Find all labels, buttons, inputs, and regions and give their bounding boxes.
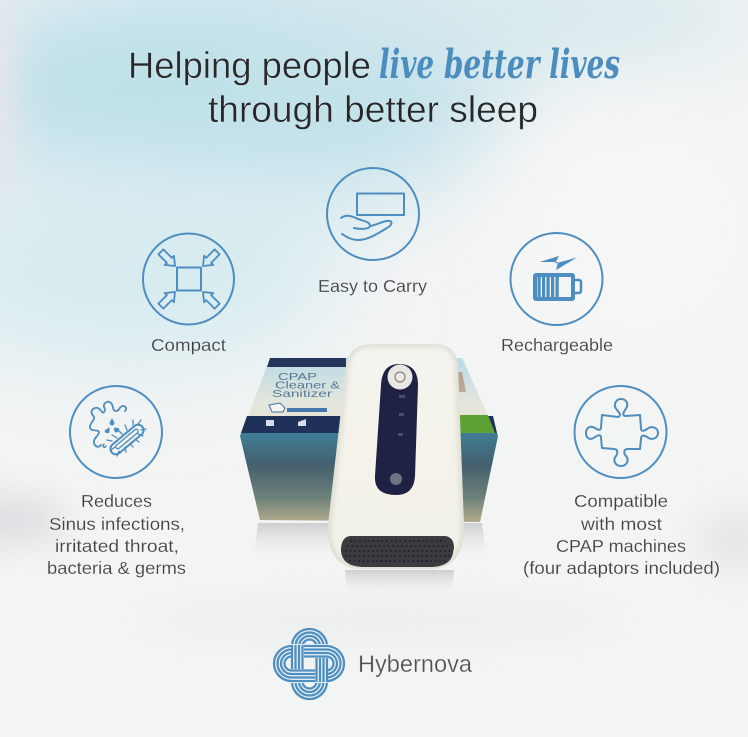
feature: reduces bbox=[47, 386, 186, 578]
icon: inward arrows bbox=[143, 234, 234, 324]
box small icons bbox=[266, 419, 306, 426]
logo mark bbox=[274, 629, 344, 699]
device body bbox=[328, 344, 464, 569]
label: compact: Compact bbox=[151, 335, 226, 355]
device edge shading bbox=[328, 344, 464, 569]
icon: hand holding device bbox=[327, 168, 419, 260]
label: compatible: (four adaptors included) bbox=[523, 558, 720, 578]
logo wordmark: Hybernova bbox=[358, 651, 472, 678]
panel indicators bbox=[398, 395, 405, 436]
feature: compact bbox=[143, 234, 234, 355]
label: compatible: Compatible bbox=[574, 491, 668, 511]
power button bbox=[388, 364, 412, 390]
label: reduces: Sinus infections, bbox=[49, 514, 185, 534]
icon: puzzle piece bbox=[574, 386, 666, 478]
label: reduces bbox=[47, 491, 186, 578]
title: Helping people bbox=[128, 45, 371, 86]
title: through better sleep bbox=[208, 89, 538, 130]
label: compatible bbox=[523, 491, 720, 578]
label: rechargeable: Rechargeable bbox=[501, 335, 613, 355]
product reflection bbox=[254, 523, 486, 592]
panel logo bbox=[390, 473, 402, 485]
feature: easy to carry bbox=[318, 168, 427, 296]
feature: rechargeable bbox=[501, 233, 613, 355]
box bbox=[240, 358, 498, 522]
label: compatible: CPAP machines bbox=[556, 536, 686, 556]
box front text: Sanitizer bbox=[272, 388, 333, 400]
title highlight: live better lives bbox=[379, 41, 620, 88]
icon: germs bbox=[70, 386, 162, 478]
logo bbox=[274, 629, 472, 699]
product: box and device bbox=[240, 344, 498, 592]
feature: compatible bbox=[523, 386, 720, 578]
box front text bbox=[272, 371, 340, 400]
label: reduces: Reduces bbox=[81, 491, 152, 511]
icon: battery bbox=[510, 233, 602, 325]
box front text: Cleaner & bbox=[275, 380, 340, 392]
device grille bbox=[341, 536, 454, 567]
label: compatible: with most bbox=[580, 514, 662, 534]
title bbox=[128, 41, 620, 130]
box ease of use strip bbox=[269, 403, 327, 412]
label: reduces: irritated throat, bbox=[55, 536, 179, 556]
box front text: CPAP bbox=[278, 371, 317, 383]
device control panel bbox=[375, 364, 418, 495]
label: easy to carry: Easy to Carry bbox=[318, 276, 427, 296]
label: reduces: bacteria & germs bbox=[47, 558, 186, 578]
